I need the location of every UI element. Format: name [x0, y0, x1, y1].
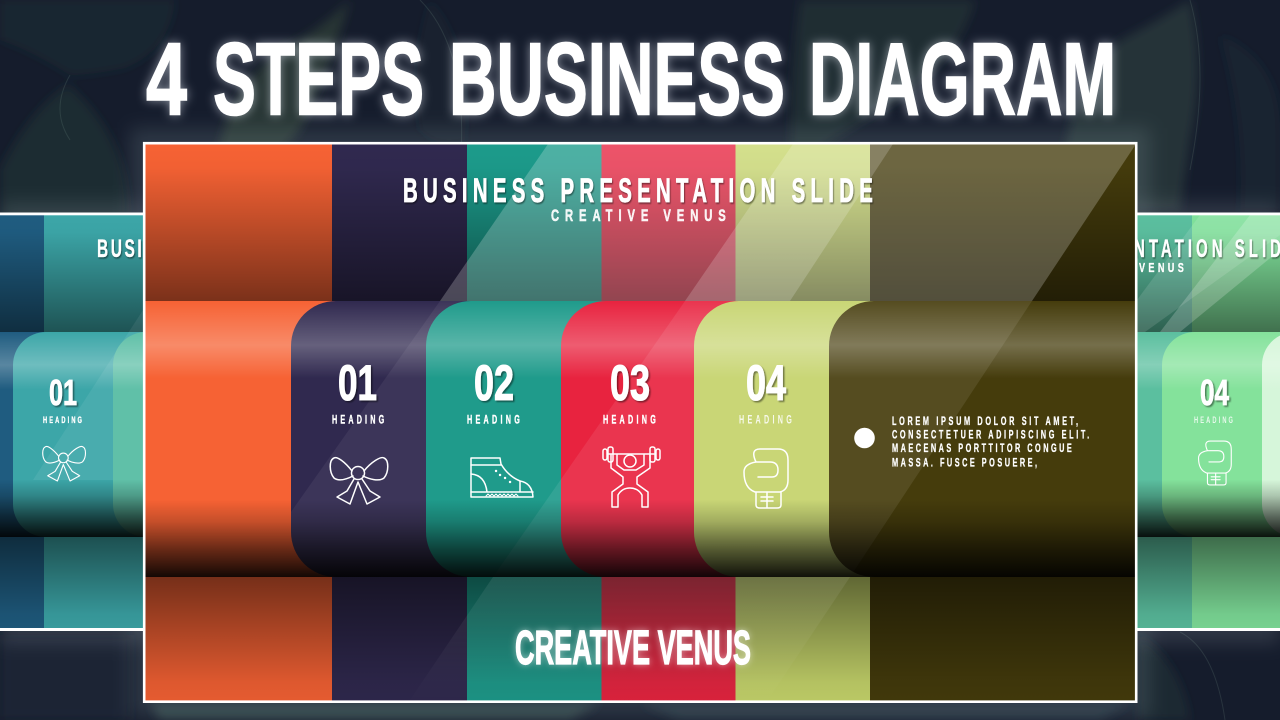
card: left slide step 01 — [13, 332, 143, 537]
number 01: 01 — [338, 355, 377, 411]
card: left slide next step — [113, 332, 143, 528]
icon: left slide bow — [43, 446, 85, 481]
icon: bullet dot — [854, 428, 875, 448]
glass streak on step 01 — [291, 301, 466, 532]
step 03 — [603, 355, 660, 507]
icon: weightlifter — [603, 447, 660, 507]
icon: boot — [471, 458, 533, 497]
slide subheading: CREATIVE VENUS — [551, 206, 726, 225]
card: right slide next step — [1262, 332, 1280, 537]
right slide subtitle fragment: VENUS — [1139, 262, 1184, 275]
card: step 01 navy — [291, 301, 470, 577]
heading 01: HEADING — [332, 414, 384, 427]
panel: left background slide — [0, 215, 146, 628]
body text — [892, 415, 1089, 470]
step 02 — [467, 355, 533, 497]
main slide frame — [144, 143, 1136, 702]
card: step 04 lime — [694, 301, 874, 577]
card: step 02 teal — [426, 301, 605, 577]
icon: bow — [330, 458, 388, 504]
card: right slide step 04 — [1162, 332, 1280, 537]
right slide heading: HEADING — [1194, 415, 1233, 425]
side slide frames — [0, 212, 1280, 631]
left slide number 01: 01 — [49, 372, 77, 413]
left slide heading: HEADING — [43, 415, 82, 425]
icon: right slide glove — [1199, 441, 1231, 485]
panel: main slide — [145, 144, 1136, 701]
middle band glass streak — [513, 301, 1032, 550]
middle band base — [332, 301, 336, 302]
card: detail olive — [829, 301, 1135, 577]
step 04 — [739, 355, 792, 508]
step 01 — [330, 355, 388, 504]
footer brand text: CREATIVE VENUS — [515, 622, 751, 675]
panel: right background slide — [1134, 215, 1280, 628]
title: 4 — [146, 22, 187, 136]
body text: MASSA. FUSCE POSUERE, — [892, 457, 1037, 470]
number 04: 04 — [746, 355, 786, 411]
left slide title fragment: BUSI — [97, 235, 142, 263]
slide heading: BUSINESS PRESENTATION SLIDE — [403, 172, 873, 209]
icon: boxing glove — [744, 449, 788, 508]
bottom section shading — [145, 577, 1135, 701]
body text: CONSECTETUER ADIPISCING ELIT. — [892, 429, 1089, 442]
right slide title fragment: NTATION SLID — [1134, 235, 1280, 263]
top section shading — [145, 144, 1136, 301]
heading 03: HEADING — [603, 414, 656, 427]
right slide number 04: 04 — [1200, 372, 1229, 413]
title — [146, 22, 1116, 136]
body text: MAECENAS PORTTITOR CONGUE — [892, 442, 1072, 456]
colour columns — [145, 144, 1135, 701]
title: STEPS — [213, 22, 424, 136]
card: step 03 red — [561, 301, 738, 577]
title: BUSINESS — [449, 22, 785, 136]
heading 04: HEADING — [739, 414, 792, 427]
number 03: 03 — [610, 355, 650, 411]
heading 02: HEADING — [467, 414, 520, 427]
middle band shading — [145, 301, 1135, 577]
body text: LOREM IPSUM DOLOR SIT AMET, — [892, 415, 1078, 429]
number 02: 02 — [474, 355, 514, 411]
